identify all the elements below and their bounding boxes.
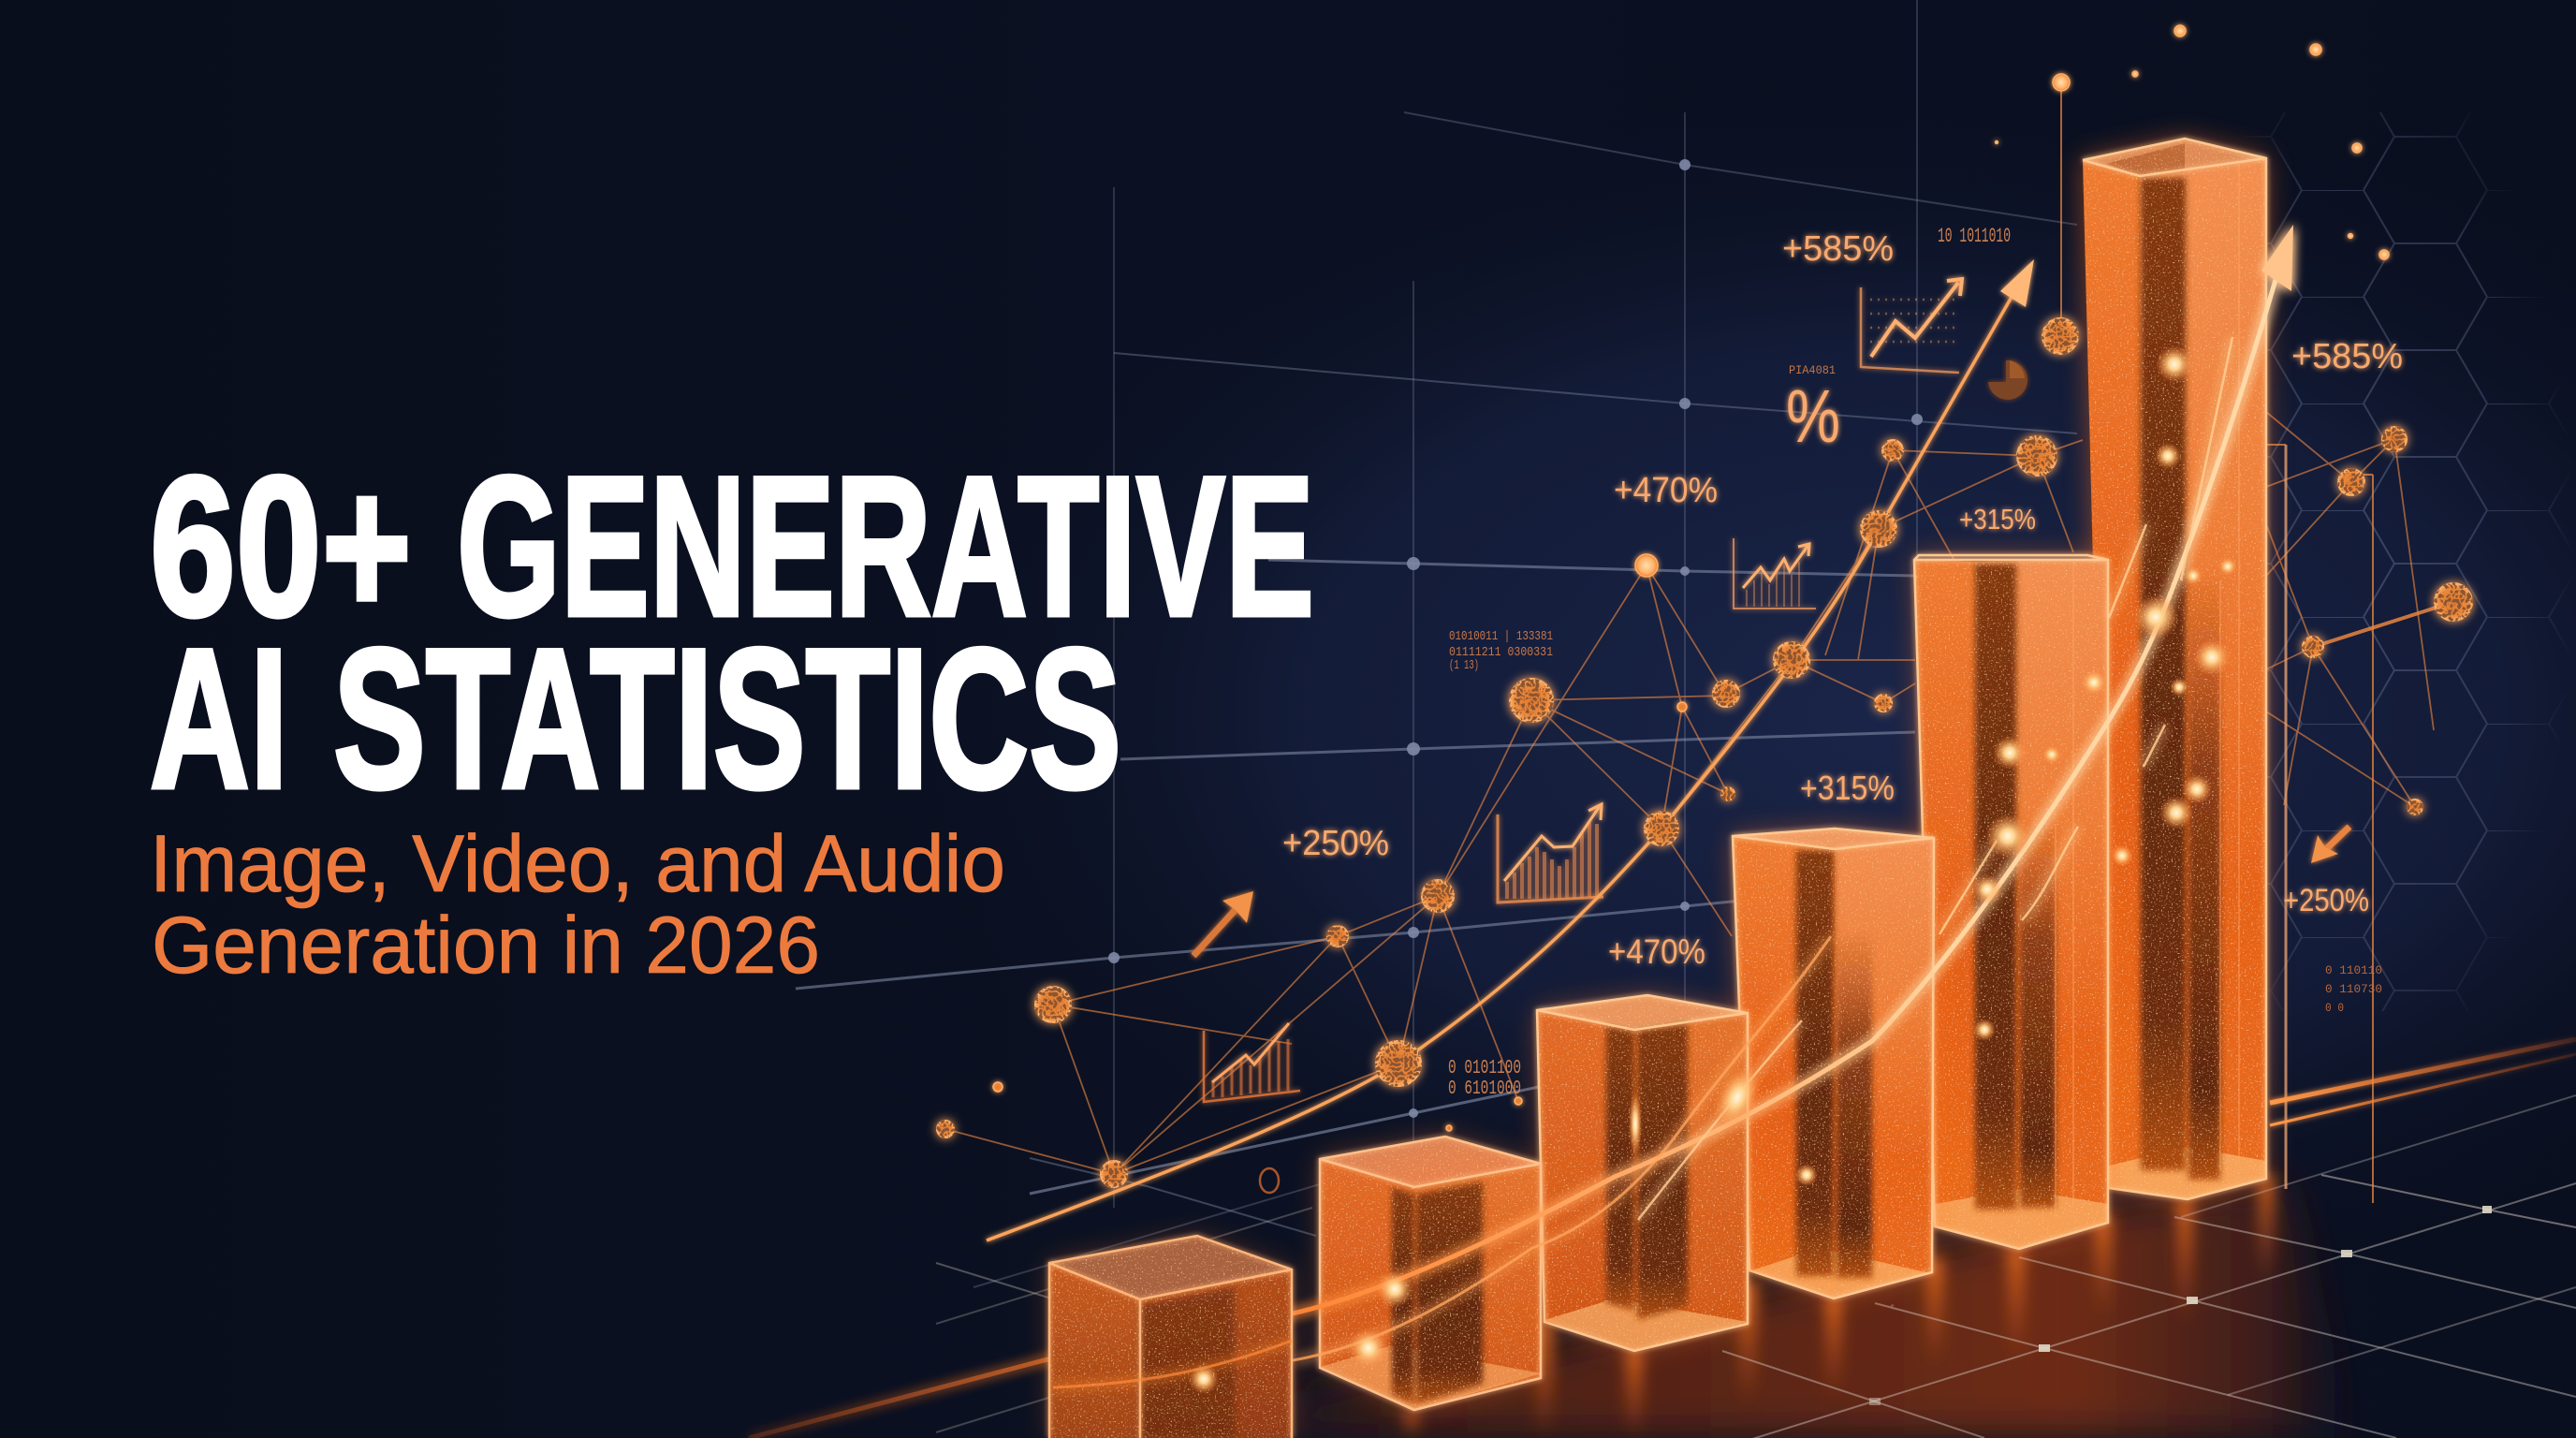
micro text: binary block left: 01111211 0300331 — [1449, 645, 1553, 660]
micro text: binary block right: 0 110110 — [2325, 963, 2382, 977]
mini chart: lower bar and line chart — [1204, 1023, 1300, 1102]
network nodes, textured — [937, 318, 2472, 1187]
micro text: percent caption: PIA4081 — [1789, 363, 1836, 377]
title line 2: STATISTICS — [333, 608, 1121, 830]
subtitle — [150, 819, 1005, 990]
main growth curve with arrow — [987, 259, 2034, 1240]
bar, 250 percent — [1320, 1137, 1542, 1411]
label: +315% lower: +315% — [1800, 769, 1895, 807]
label: +470% upper: +470% — [1614, 471, 1718, 510]
label: +250% right: +250% — [2283, 883, 2369, 918]
icon: small up arrow — [1193, 891, 1253, 956]
label: +250% left: +250% — [1282, 824, 1389, 863]
light swoosh through bars — [749, 225, 2293, 1438]
front bar — [1049, 1236, 1292, 1438]
micro text: upper binary: 10 1011010 — [1938, 225, 2011, 248]
title line 1: GENERATIVE — [457, 435, 1314, 658]
micro text: binary block lower: 0 6101000 — [1448, 1078, 1521, 1100]
micro text: binary block left: (1 13) — [1449, 658, 1479, 673]
icon: down-left arrow — [2311, 827, 2349, 863]
wall grid lines — [796, 0, 2077, 1287]
hexagon mesh — [2260, 112, 2563, 1011]
bar, 470 percent — [1537, 995, 1748, 1351]
icon: pie chart — [1988, 360, 2027, 400]
streak across front bar — [1053, 1341, 1292, 1387]
mini chart: mid line chart — [1734, 538, 1816, 609]
micro text: binary block lower: 0 0101100 — [1448, 1058, 1521, 1079]
mini chart: bar and line chart — [1498, 804, 1603, 902]
micro text: binary block left: 01010011 | 133381 — [1449, 629, 1553, 644]
micro text: binary block left — [1449, 629, 1553, 673]
bar, 315 percent — [1914, 555, 2108, 1249]
title line 1 — [150, 435, 1314, 658]
subtitle line 1: Image, Video, and Audio — [150, 819, 1005, 909]
tall bar, 585 percent — [2083, 139, 2266, 1203]
title line 2: AI — [150, 608, 288, 830]
icon text: percent sign: % — [1786, 374, 1840, 458]
stat labels — [1282, 229, 2403, 971]
label: +470% lower: +470% — [1608, 932, 1705, 971]
bar, 315 percent lower — [1733, 829, 1934, 1299]
subtitle line 2: Generation in 2026 — [152, 901, 820, 990]
mini chart: upper line chart — [1861, 279, 1962, 373]
title line 1: 60+ — [150, 435, 412, 658]
title — [150, 435, 1314, 830]
perspective floor grid — [936, 1095, 2576, 1438]
icon: small ring glyph — [1260, 1168, 1279, 1193]
floor light streaks right — [2270, 1039, 2576, 1125]
micro text: binary block right — [2325, 963, 2382, 1015]
label: +585% right: +585% — [2291, 337, 2403, 376]
micro text: binary block right: 0 0 — [2325, 1001, 2344, 1015]
title line 2 — [150, 608, 1121, 830]
label: +315% upper: +315% — [1959, 503, 2036, 536]
micro data text — [1448, 225, 2382, 1100]
label: +585% upper: +585% — [1782, 229, 1894, 269]
micro text: binary block lower — [1448, 1058, 1521, 1100]
small bright nodes — [993, 25, 2389, 1131]
micro text: binary block right: 0 110730 — [2325, 982, 2382, 996]
sparkles inside bars — [1189, 345, 2237, 1394]
network connection lines — [945, 82, 2453, 1203]
floor reflection — [1217, 1175, 2359, 1438]
